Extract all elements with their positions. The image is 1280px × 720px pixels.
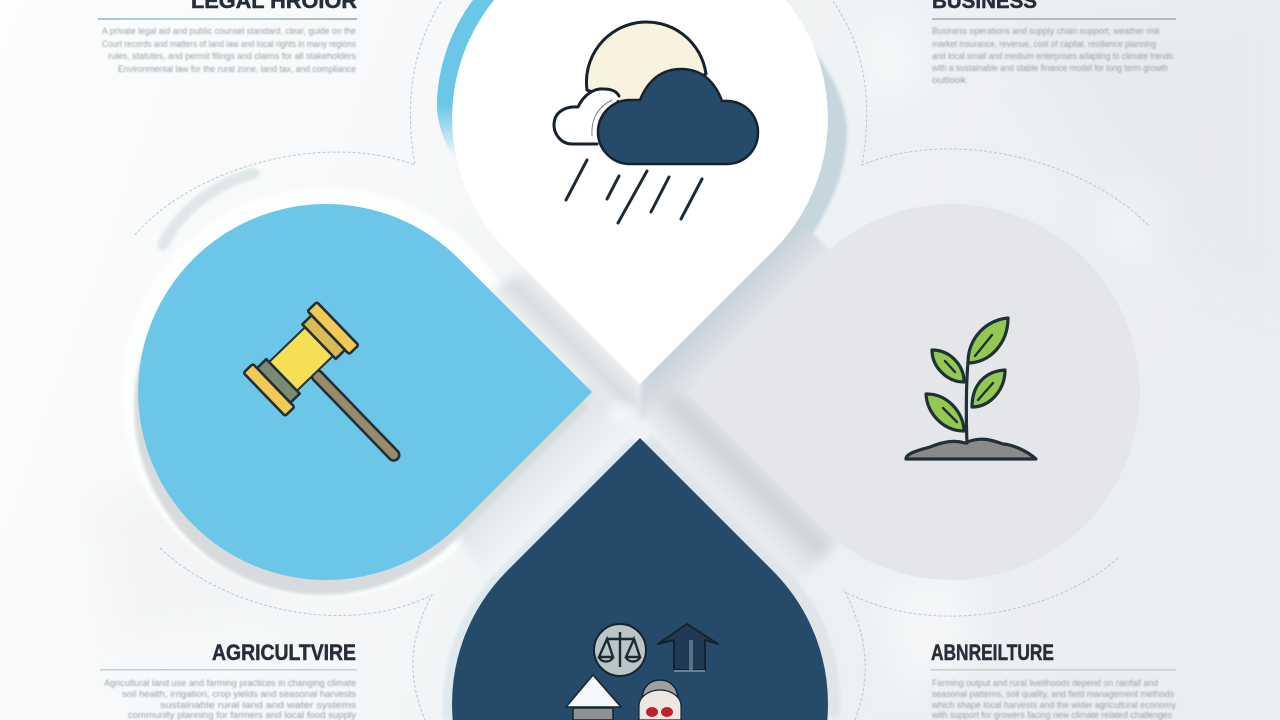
text block: bottom right: seasonal patterns, soil quality, and field management methods: [932, 689, 1174, 699]
gavel body: [269, 327, 333, 391]
icon: face figure: [639, 680, 681, 720]
icon: scales badge: [594, 624, 646, 676]
text block: top right: [931, 26, 1173, 85]
soil: [906, 439, 1036, 459]
panel: right grey drop: [686, 204, 1140, 580]
gavel left collar: [257, 359, 300, 403]
lower left leaf: [926, 394, 964, 431]
text block: top right: and local small and medium enterprises adapting to climate trends: [932, 51, 1173, 61]
text block: bottom left: Agricultural land use and farming practices in changing climate: [104, 678, 356, 688]
text block: top left: Court records and matters of land law and local rights in many regions: [102, 39, 356, 49]
heading: agriculture left: AGRICULTVIRE: [212, 640, 356, 665]
text block: bottom right: [931, 678, 1176, 720]
text block: top right: outlook: [932, 75, 967, 85]
text block: top left: A private legal aid and public counsel standard, clear, guide on the: [102, 26, 356, 36]
panel: bottom navy drop: [452, 438, 828, 720]
text block: top left: Environmental law for the rural zone, land tax, and compliance: [118, 64, 356, 74]
dark cloud: [598, 69, 758, 164]
stem: [966, 362, 968, 443]
panel: top white drop: [452, 0, 828, 384]
rain lines: [566, 160, 702, 223]
drop shadows and centre bands: [134, 219, 850, 720]
text block: bottom left: soil health, irrigation, crop yields and seasonal harvests: [122, 689, 357, 699]
icon: small dark house: [658, 624, 718, 671]
soft arc accent: [163, 173, 254, 245]
icon: sun behind rain clouds: [554, 22, 758, 223]
gavel right collar: [302, 315, 345, 359]
text block: top left: rules, statutes, and permit filings and claims for all stakeholders: [108, 51, 356, 61]
text block: top right: with a sustainable and stable finance model for long term growth: [931, 63, 1168, 73]
icon: seedling: [906, 318, 1036, 459]
text block: bottom right: which shape local harvests and the wider agricultural economy: [931, 700, 1176, 710]
heading: agriculture right: ABNREILTURE: [931, 640, 1054, 665]
text block: top left: [102, 26, 356, 74]
upper left leaf: [932, 350, 964, 382]
text block: bottom right: with support for growers facing new climate related challenges: [931, 710, 1172, 720]
text block: top right: Business operations and supply chain support, weather risk: [932, 26, 1160, 36]
panel: left blue drop: [138, 204, 592, 580]
gavel left cap: [243, 364, 295, 416]
sun: [586, 22, 706, 110]
text block: bottom left: sustainable rural land and water systems: [160, 700, 357, 710]
text block: bottom right: Farming output and rural livelihoods depend on rainfall and: [932, 678, 1158, 688]
icon: white house roof: [566, 675, 621, 720]
text block: bottom left: community planning for farmers and local food supply: [128, 710, 357, 720]
top leaf: [968, 318, 1008, 363]
small white cloud: [554, 89, 619, 144]
crescent accents behind top drop: [437, 0, 847, 262]
icon: gavel: [243, 302, 434, 494]
dashed connector arcs: [135, 0, 1148, 720]
text block: bottom left: [104, 678, 357, 720]
upper right leaf: [972, 370, 1005, 407]
heading rules: [98, 18, 1176, 670]
text block: top right: market insurance, revenue, cost of capital, resilience planning: [932, 39, 1156, 49]
leaf veins: [943, 335, 993, 422]
gavel handle: [310, 368, 402, 463]
gavel right cap: [307, 302, 359, 354]
inner cloud line: [592, 100, 612, 136]
